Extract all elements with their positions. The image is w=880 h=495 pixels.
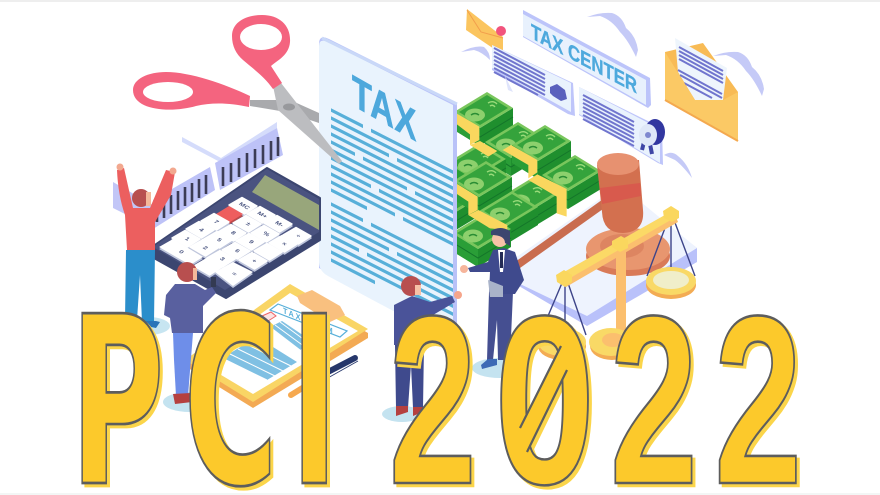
scissor blades xyxy=(250,100,319,123)
calculator keys: ± xyxy=(244,221,253,227)
shoe xyxy=(481,359,497,369)
shirt and raised arms xyxy=(117,168,175,250)
platform under gavel and scale xyxy=(495,185,697,326)
gavel sound block xyxy=(586,236,670,276)
form check boxes and text blocks xyxy=(222,312,313,380)
envelope notification xyxy=(466,9,506,55)
top edge band xyxy=(0,0,880,2)
clipboard with tax form xyxy=(185,284,368,408)
jacket and arm xyxy=(468,248,524,294)
scale right pan ropes xyxy=(647,220,695,289)
calculator xyxy=(152,168,320,298)
calculator keys: M+ xyxy=(255,211,269,220)
calculator keys: 2 xyxy=(201,245,210,251)
tax document sheet xyxy=(319,37,457,345)
scissors xyxy=(133,15,342,164)
shoes xyxy=(396,406,408,416)
legs xyxy=(487,292,513,360)
money paper bands xyxy=(453,112,567,230)
calculator keys: 4 xyxy=(197,227,206,233)
clipboard clip xyxy=(297,290,345,322)
info panel with tyre icon xyxy=(579,87,665,165)
calculator keys: 5 xyxy=(215,237,224,243)
document text lines xyxy=(331,110,453,322)
calculator keys: 1 xyxy=(183,236,192,242)
head xyxy=(132,189,150,207)
tax center sign xyxy=(523,10,651,108)
pants xyxy=(125,250,155,322)
car icon xyxy=(550,84,567,101)
money stacks xyxy=(420,92,601,267)
shoe xyxy=(173,393,192,404)
info panel with car icon xyxy=(492,45,575,116)
calculator keys: % xyxy=(261,231,271,238)
bottom edge band xyxy=(0,493,880,495)
scale right pan xyxy=(646,271,696,299)
balance scale xyxy=(538,206,696,360)
person with arms raised xyxy=(116,164,176,335)
scale left pan xyxy=(538,332,586,360)
head xyxy=(492,231,508,247)
scissor handle top xyxy=(232,15,290,89)
calculator keys: 8 xyxy=(229,230,238,236)
calculator keys: ÷ xyxy=(294,233,303,239)
calculator screen xyxy=(252,175,319,230)
calculator keys: + xyxy=(250,258,258,264)
form header TAX FORM xyxy=(270,304,347,337)
tyre icon xyxy=(639,119,665,154)
calculator keys: 0 xyxy=(177,249,186,255)
scale post xyxy=(616,240,626,332)
trousers xyxy=(173,333,193,396)
clipboard in hand xyxy=(488,280,503,297)
scissor handle left xyxy=(133,72,250,110)
gavel handle xyxy=(515,197,610,268)
headline PCI 2022 xyxy=(70,267,802,495)
ruler-like tax barriers xyxy=(113,122,283,229)
jacket and arm xyxy=(394,296,455,345)
gavel xyxy=(515,153,670,276)
open envelope with letter xyxy=(665,38,738,141)
calculator keys: 7 xyxy=(212,219,221,225)
gavel head xyxy=(597,160,643,233)
person holding phone xyxy=(163,262,217,412)
scale base xyxy=(590,332,634,360)
cloud swooshes xyxy=(461,13,764,178)
sign label: TAX CENTER xyxy=(531,20,637,99)
calculator keys: 9 xyxy=(247,239,256,245)
standing man pointing xyxy=(382,276,462,422)
calculator keys xyxy=(159,198,311,288)
form header TAX FORM: TAX FORM xyxy=(283,306,334,337)
head xyxy=(177,262,197,282)
suited man with document xyxy=(460,228,528,378)
phone xyxy=(211,277,216,287)
calculator keys: 3 xyxy=(218,256,227,262)
calculator keys: MC xyxy=(237,201,251,211)
calculator keys: = xyxy=(230,271,238,277)
calculator keys: M- xyxy=(273,220,285,228)
scale left pan ropes xyxy=(548,283,586,345)
head xyxy=(401,276,421,296)
pen xyxy=(291,358,358,395)
calculator keys: 6 xyxy=(233,248,242,254)
legs xyxy=(395,345,424,408)
scale beam xyxy=(557,211,678,281)
jacket xyxy=(164,284,216,333)
calculator keys: × xyxy=(280,241,288,247)
document heading TAX: TAX xyxy=(352,65,417,152)
